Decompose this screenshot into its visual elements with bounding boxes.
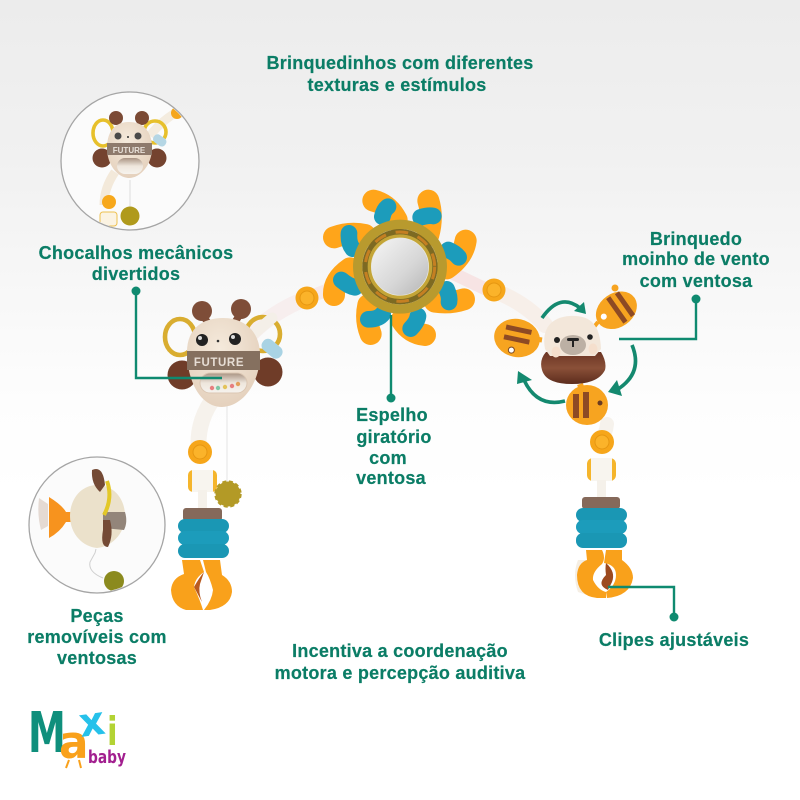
arrows: rotation bbox=[517, 302, 636, 402]
toy: left rattle assembly bbox=[165, 299, 285, 610]
label: removable parts: Peças bbox=[70, 606, 124, 626]
logo: Maxi baby: baby bbox=[88, 748, 126, 768]
panel: rattle close-up circle bbox=[61, 92, 199, 230]
bee top right bbox=[589, 284, 644, 337]
logo: Maxi baby bbox=[28, 698, 126, 769]
rattle window bbox=[200, 373, 247, 393]
label: coordination: Incentiva a coordenação bbox=[292, 641, 508, 661]
icon: arch disc left bbox=[296, 286, 318, 310]
heading: textures: texturas e estímulos bbox=[307, 75, 487, 95]
label: rotating mirror: giratório bbox=[356, 427, 432, 447]
heading: textures: Brinquedinhos com diferentes bbox=[266, 53, 534, 73]
panel: suction cup close-up circle bbox=[29, 457, 165, 593]
rattle band label: FUTURE bbox=[113, 146, 146, 155]
toy: right windmill assembly bbox=[491, 284, 644, 598]
logo: Maxi baby: M bbox=[28, 702, 66, 766]
gold teether bbox=[216, 482, 240, 506]
connector: clip line bbox=[608, 587, 678, 622]
brown teethers bbox=[168, 360, 196, 390]
right cap bbox=[582, 497, 620, 509]
left joint bbox=[188, 470, 217, 492]
label: rotating mirror: ventosa bbox=[356, 468, 427, 488]
bee bottom bbox=[566, 385, 608, 425]
right disc bbox=[590, 430, 614, 454]
band bbox=[187, 351, 260, 370]
label: rotating mirror: com bbox=[369, 448, 407, 468]
blue teether bbox=[259, 336, 285, 361]
icon: arch disc right bbox=[482, 278, 506, 302]
label: windmill toy: com ventosa bbox=[640, 271, 753, 291]
lower arm bbox=[600, 424, 607, 442]
ear rings bbox=[165, 319, 195, 355]
bee left bbox=[491, 315, 543, 361]
right joint bbox=[587, 458, 616, 481]
logo: Maxi baby: x bbox=[76, 698, 108, 747]
left cap bbox=[183, 508, 222, 521]
label: mechanical rattles: Chocalhos mecânicos bbox=[39, 243, 233, 263]
band text: FUTURE bbox=[194, 357, 244, 369]
connector: mirror line bbox=[386, 315, 396, 402]
label: coordination: motora e percepção auditiva bbox=[275, 663, 526, 683]
logo: Maxi baby: i bbox=[107, 710, 118, 755]
toy: arch arms bbox=[250, 272, 545, 335]
label: removable parts: ventosas bbox=[57, 648, 137, 668]
label: windmill toy: Brinquedo bbox=[650, 229, 742, 249]
left blue rings bbox=[178, 519, 229, 533]
logo: Maxi baby: a bbox=[59, 716, 88, 769]
pot bbox=[541, 352, 606, 384]
left arm bbox=[198, 402, 211, 452]
left disc bbox=[188, 440, 212, 464]
right clip bbox=[575, 560, 590, 596]
connector: windmill line bbox=[619, 294, 700, 339]
bear head bbox=[544, 316, 601, 356]
label: mechanical rattles: divertidos bbox=[92, 264, 180, 284]
toy: pinwheel mirror bbox=[334, 201, 466, 335]
right blue rings bbox=[576, 508, 627, 522]
label: removable parts: removíveis com bbox=[27, 627, 167, 647]
connector: rattle line bbox=[132, 286, 222, 378]
label: windmill toy: moinho de vento bbox=[622, 249, 770, 269]
ears bbox=[192, 299, 251, 325]
left clip bbox=[171, 560, 204, 610]
label: rotating mirror: Espelho bbox=[356, 405, 428, 425]
eyes bbox=[196, 334, 208, 346]
string bbox=[226, 405, 228, 482]
rattle head bbox=[187, 318, 260, 407]
label: adjustable clips: Clipes ajustáveis bbox=[599, 630, 749, 650]
